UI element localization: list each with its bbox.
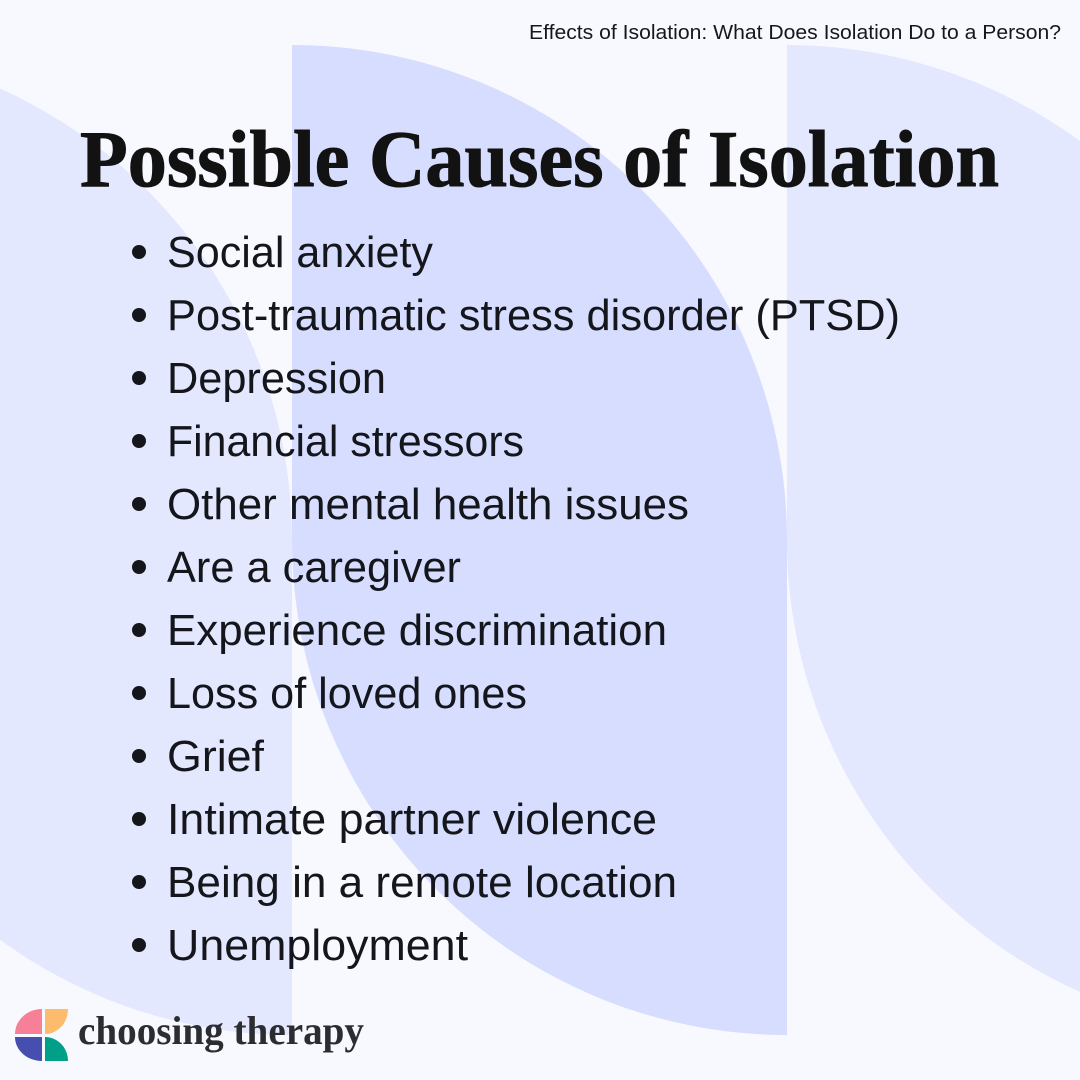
article title: Effects of Isolation: What Does Isolation Do to a Person? [529,21,1061,44]
item: intimate partner violence: Intimate partner violence [167,795,657,844]
item: social anxiety: Social anxiety [167,228,433,277]
item: other mental health issues: Other mental health issues [167,480,689,529]
logo [15,1008,364,1061]
item: PTSD: Post-traumatic stress disorder (PTSD) [167,291,900,340]
logo wordmark: choosing therapy [78,1008,364,1053]
item: loss of loved ones: Loss of loved ones [167,669,527,718]
item: discrimination: Experience discrimination [167,606,667,655]
item: caregiver: Are a caregiver [167,543,461,592]
item: unemployment: Unemployment [167,921,468,970]
item: grief: Grief [167,732,265,781]
heading: Possible Causes of Isolation [80,116,999,204]
item: depression: Depression [167,354,386,403]
item: remote location: Being in a remote location [167,858,677,907]
item: financial stressors: Financial stressors [167,417,524,466]
icon: logo mark [15,1009,68,1061]
list of causes [132,228,900,970]
